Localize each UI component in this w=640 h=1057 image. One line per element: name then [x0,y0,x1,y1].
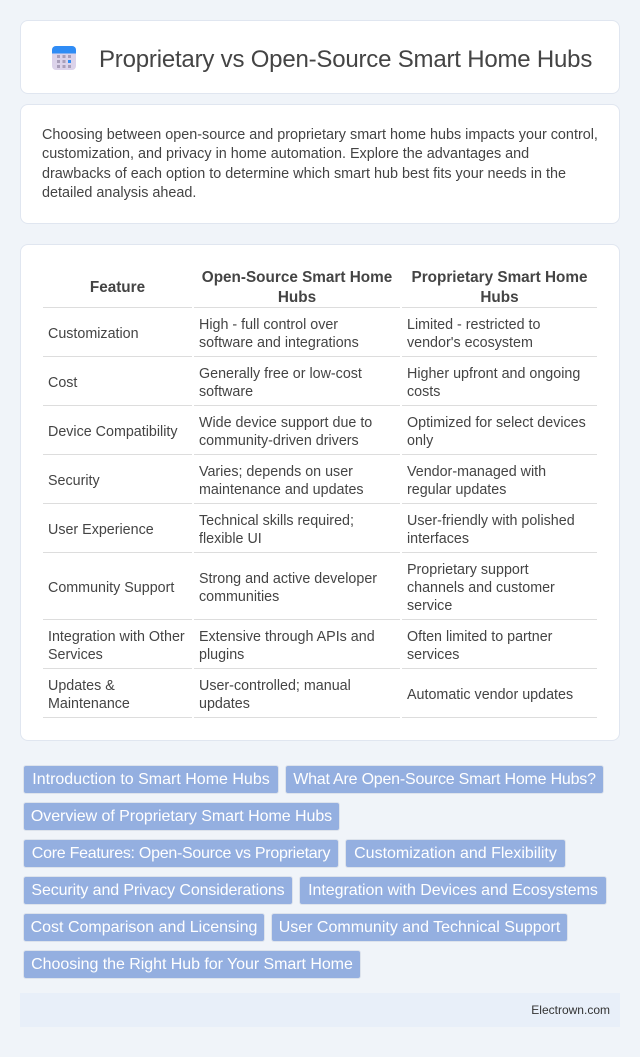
comparison table: User Experience [48,522,154,538]
comparison table: costs [407,384,440,400]
tag [23,950,361,979]
comparison table: software [199,384,253,400]
comparison table: Higher upfront and ongoing [407,366,580,382]
comparison table: Security [48,473,100,489]
intro text: detailed analysis ahead. [42,185,196,201]
comparison table: Strong and active developer [199,571,377,587]
tag [285,765,604,794]
comparison table: Customization [48,326,139,342]
comparison table: Cost [48,375,77,391]
comparison table: services [407,647,459,663]
tag [23,839,339,868]
tag: Integration with Devices and Ecosystems [308,882,598,899]
tag: Core Features: Open-Source vs Proprietary [32,845,330,862]
comparison table: Proprietary support [407,562,529,578]
tag: What Are Open-Source Smart Home Hubs? [293,771,596,788]
comparison table: community-driven drivers [199,433,359,449]
comparison table: updates [199,696,250,712]
comparison table: Generally free or low-cost [199,366,362,382]
tag [23,802,340,831]
tag [299,876,607,905]
tag [345,839,566,868]
comparison table: Open-Source Smart Home [202,269,392,286]
tag: Cost Comparison and Licensing [31,919,257,936]
intro panel [20,104,620,224]
tag: Security and Privacy Considerations [31,882,285,899]
comparison table: Hubs [278,289,316,306]
intro text: drawbacks of each option to determine which smart hub best fits your needs in the [42,166,566,182]
footer: Electrown.com [531,1003,610,1017]
comparison table: Device Compatibility [48,424,178,440]
comparison table: Hubs [480,289,519,306]
comparison table: interfaces [407,531,469,547]
comparison table: Community Support [48,580,174,596]
title: Proprietary vs Open-Source Smart Home Hubs [99,46,592,73]
tag [271,913,568,942]
comparison table: Services [48,647,103,663]
tag [23,913,265,942]
comparison table: vendor's ecosystem [407,335,533,351]
icon: calendar grid [52,46,76,70]
comparison table: service [407,598,452,614]
comparison table: Vendor-managed with [407,464,546,480]
tag [23,876,293,905]
comparison table: Limited - restricted to [407,317,540,333]
comparison table: Optimized for select devices [407,415,586,431]
topic tags [23,765,607,979]
comparison table: Proprietary Smart Home [412,269,587,286]
comparison table: User-friendly with polished [407,513,575,529]
comparison table: Often limited to partner [407,629,552,645]
intro text: Choosing between open-source and proprietary smart home hubs impacts your control, [42,127,598,143]
tag: Choosing the Right Hub for Your Smart Home [31,956,353,973]
comparison table: Varies; depends on user [199,464,353,480]
tag: Introduction to Smart Home Hubs [32,771,270,788]
comparison table: Integration with Other [48,629,185,645]
comparison table: Technical skills required; [199,513,354,529]
comparison table: software and integrations [199,335,359,351]
header panel [20,20,620,94]
comparison table: only [407,433,433,449]
tag: User Community and Technical Support [279,919,560,936]
comparison table: Maintenance [48,696,130,712]
comparison table: Automatic vendor updates [407,687,573,703]
comparison table: Extensive through APIs and [199,629,375,645]
comparison table: channels and customer [407,580,555,596]
intro text [42,127,598,201]
comparison table: communities [199,589,279,605]
comparison table panel [20,244,620,741]
comparison table: flexible UI [199,531,262,547]
comparison table: maintenance and updates [199,482,364,498]
comparison table: Updates & [48,678,115,694]
comparison table: Wide device support due to [199,415,372,431]
comparison table [43,269,597,718]
comparison table: regular updates [407,482,506,498]
footer [20,993,620,1027]
intro text: customization, and privacy in home automation. Explore the advantages and [42,146,529,162]
tag: Overview of Proprietary Smart Home Hubs [31,808,332,825]
tag [23,765,279,794]
comparison table: Feature [90,279,145,296]
comparison table: User-controlled; manual [199,678,351,694]
comparison table: High - full control over [199,317,338,333]
tag: Customization and Flexibility [354,845,557,862]
comparison table: plugins [199,647,244,663]
